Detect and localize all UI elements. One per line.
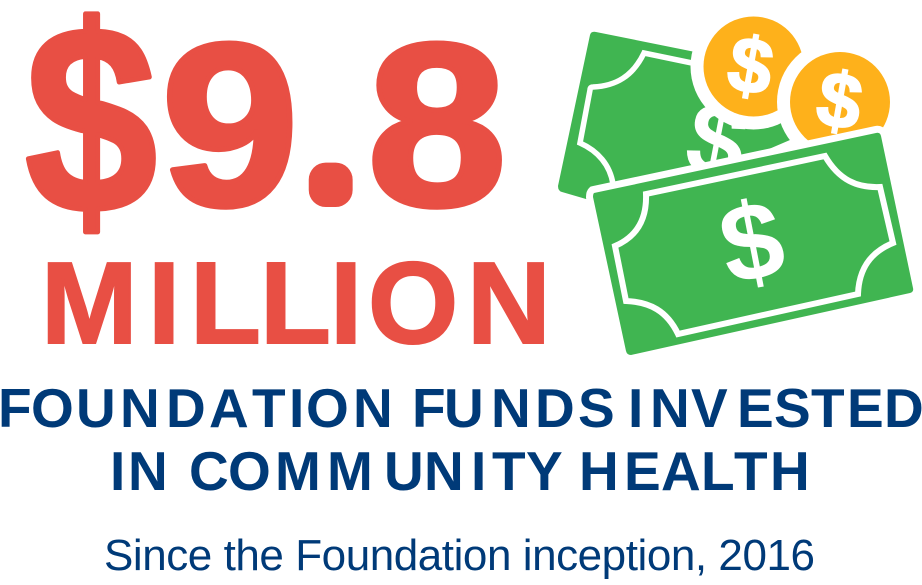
coin right: $	[811, 53, 869, 148]
subheading line 1: FOUNDATION FUNDS INVESTED	[0, 377, 922, 439]
front bill: $	[710, 176, 794, 308]
icon: money bills and coins	[558, 4, 913, 355]
headline unit: MILLION: MILLION	[41, 238, 551, 368]
headline amount: $9.8: .	[321, 127, 340, 205]
coin left	[690, 4, 816, 130]
headline amount: $9.8	[25, 0, 507, 269]
headline amount: $9.8: 9	[161, 0, 299, 255]
coin left: $	[722, 18, 780, 113]
back bill	[558, 32, 790, 204]
caption: Since the Foundation inception, 2016	[104, 531, 815, 580]
back bill: $	[677, 79, 756, 204]
subheading line 2: IN COMMUNITY HEALTH	[110, 440, 810, 502]
coin right	[777, 39, 903, 165]
front bill	[593, 133, 913, 355]
headline amount: $9.8: 8	[367, 0, 507, 255]
